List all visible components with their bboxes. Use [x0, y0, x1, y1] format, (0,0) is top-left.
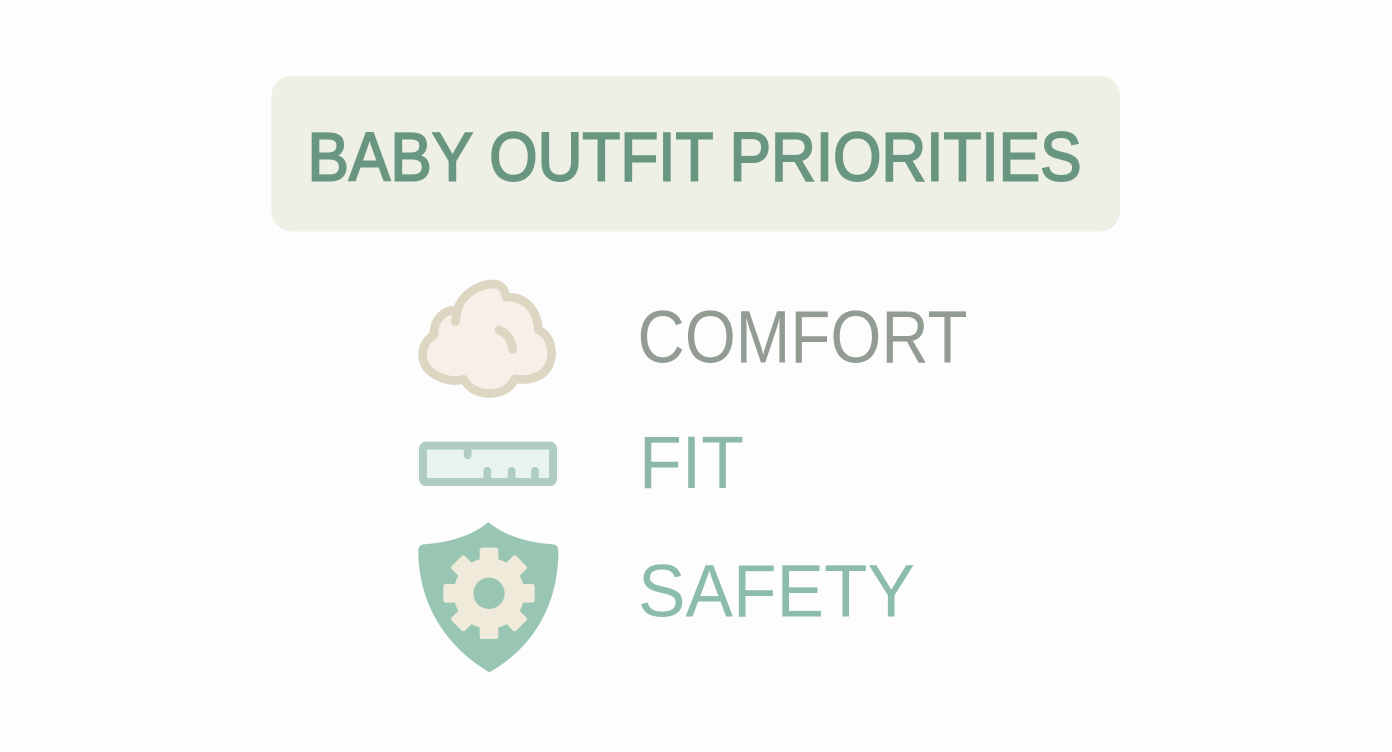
gear [443, 548, 535, 639]
icon: ruler [423, 446, 553, 482]
icon: cotton cloud [423, 284, 552, 393]
heading: BABY OUTFIT PRIORITIES [308, 118, 1082, 196]
shield [418, 522, 558, 672]
label: fit: FIT [639, 421, 744, 504]
title banner [272, 76, 1120, 232]
icon: safety shield with gear [418, 522, 558, 672]
label: safety: SAFETY [638, 550, 915, 632]
label: comfort: COMFORT [638, 296, 968, 379]
banner panel [272, 76, 1120, 232]
